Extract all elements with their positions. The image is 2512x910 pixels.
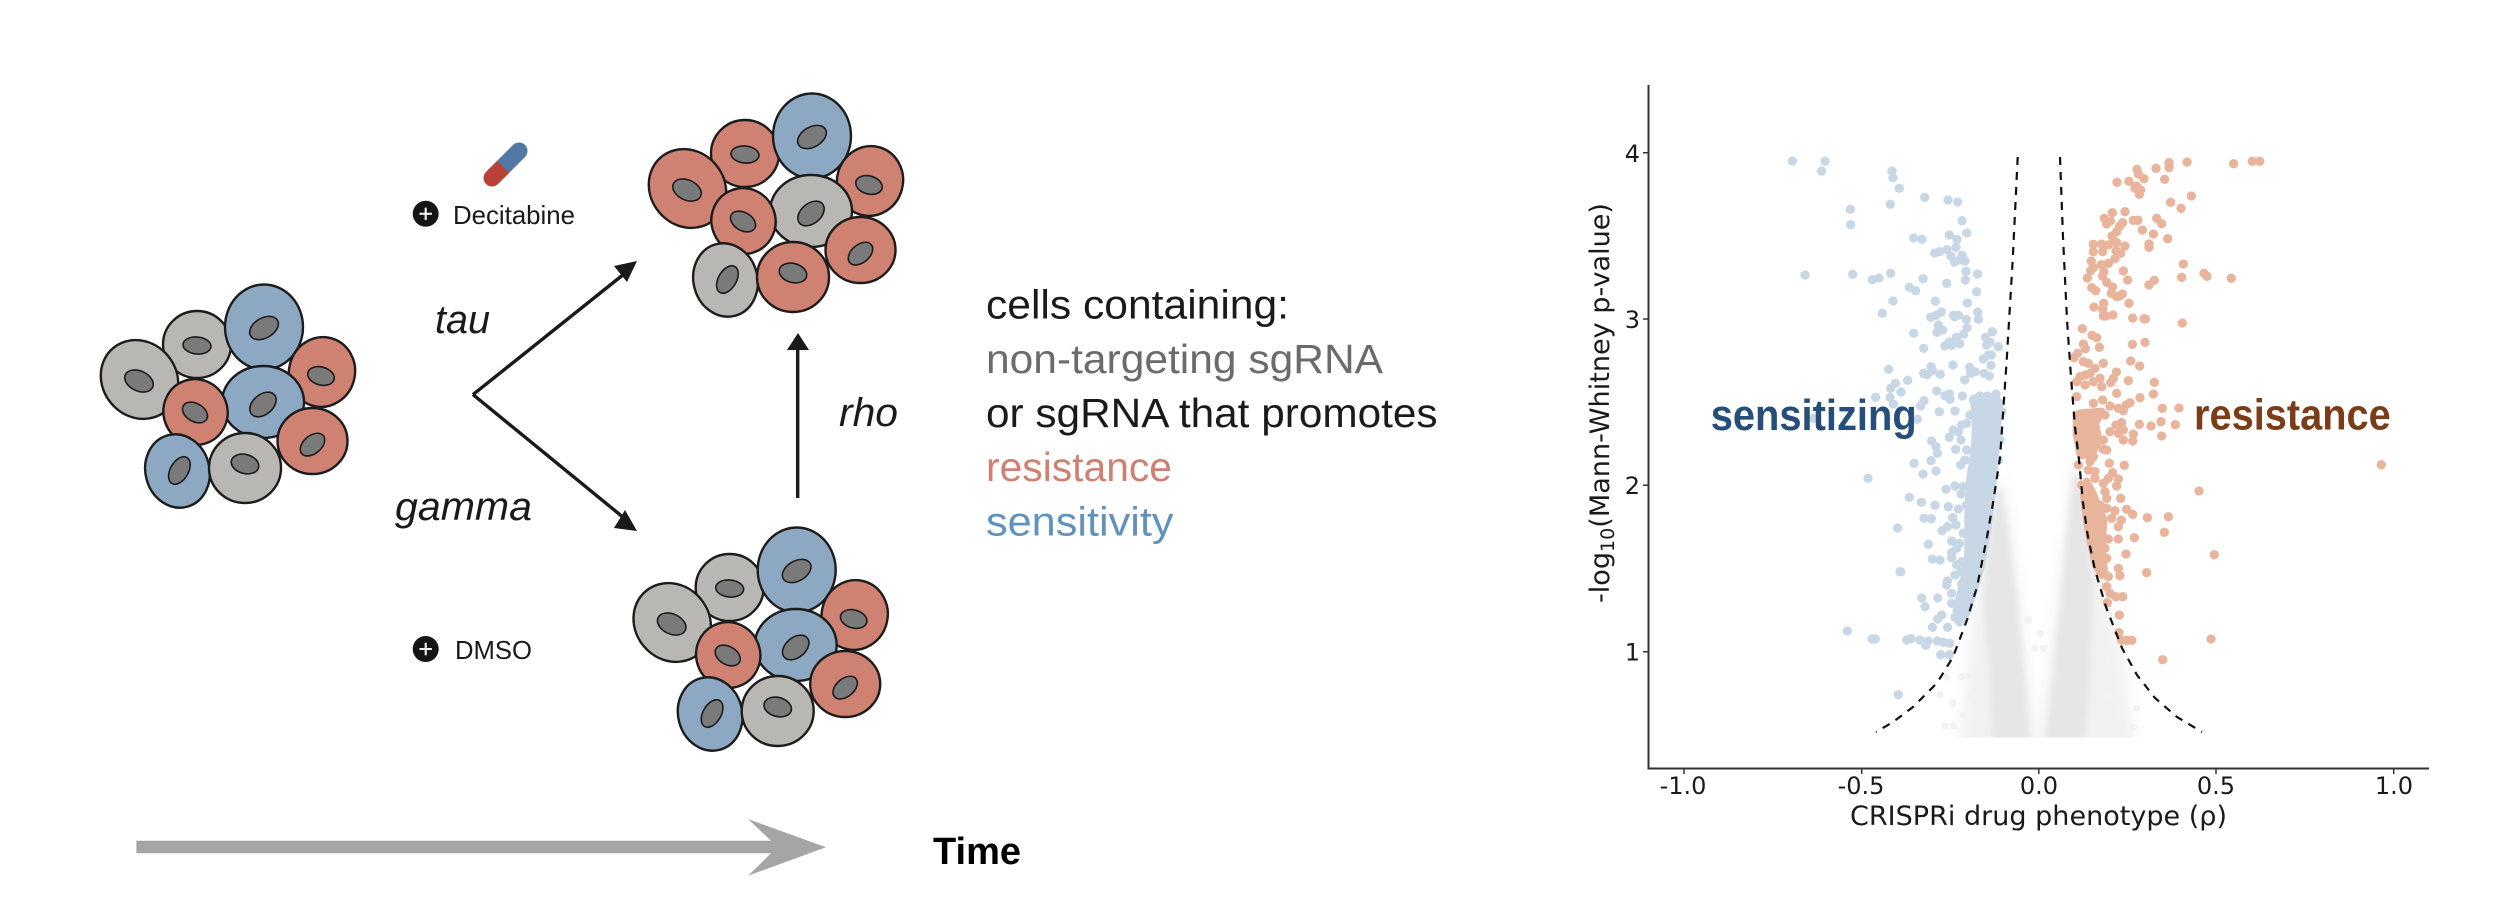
y axis tick labels: 4 — [1625, 140, 1640, 168]
significance threshold: left dashed curve — [1876, 157, 2018, 732]
label: gamma: gamma — [395, 485, 532, 529]
cell cluster: after decitabine — [633, 94, 911, 324]
chart: volcano plot — [1585, 85, 2429, 832]
legend: cells containing: sensitivity — [986, 498, 1174, 544]
y axis title: 10 — [1597, 528, 1619, 552]
axes — [1643, 85, 2429, 774]
label: time: Time — [933, 831, 1021, 873]
x axis tick labels: -1.0 — [1660, 772, 1706, 800]
arrow: rho vertical — [787, 333, 809, 498]
label: plus decitabine: Decitabine — [453, 200, 575, 230]
legend: cells containing: non-targeting sgRNA — [986, 336, 1384, 382]
y axis tick labels: 3 — [1625, 306, 1640, 334]
resistance sgRNA points — [2074, 161, 2381, 660]
label: plus DMSO: DMSO — [455, 635, 532, 665]
y axis tick labels: 2 — [1625, 472, 1640, 500]
label: tau: tau — [435, 298, 490, 342]
x axis tick labels: 1.0 — [2375, 772, 2413, 800]
x axis tick labels — [1660, 772, 2413, 800]
panel: experiment schematic — [85, 94, 1438, 876]
sensitizing sgRNA points — [1792, 161, 2002, 695]
legend: cells containing: or sgRNA that promotes — [986, 390, 1438, 436]
neutral sgRNA cloud — [1936, 471, 2140, 738]
label: plus DMSO — [413, 635, 532, 665]
x axis tick labels: 0.5 — [2197, 772, 2235, 800]
y axis title: (Mann-Whitney p-value) — [1585, 203, 1616, 528]
label: sensitizing: sensitizing — [1711, 391, 1917, 440]
x axis tick labels: 0.0 — [2020, 772, 2058, 800]
cell cluster: starting population — [85, 284, 363, 515]
arrow: branch to decitabine — [473, 261, 637, 395]
legend: cells containing: resistance — [986, 444, 1172, 490]
legend: cells containing: cells containing: — [986, 282, 1289, 328]
label: resistance: resistance — [2194, 390, 2391, 440]
y axis tick labels: 1 — [1625, 638, 1640, 666]
x axis title: CRISPRi drug phenotype (ρ) — [1850, 801, 2227, 832]
cell cluster: after DMSO — [618, 528, 896, 758]
legend: cells containing — [986, 282, 1438, 544]
arrow: branch to DMSO — [473, 395, 637, 531]
x axis tick labels: -0.5 — [1838, 772, 1884, 800]
icon: drug capsule — [492, 151, 519, 178]
label: rho: rho — [839, 391, 898, 435]
y axis title: -log — [1585, 552, 1616, 603]
significance threshold: right dashed curve — [2060, 157, 2202, 732]
y axis tick labels — [1625, 140, 1640, 666]
arrow: time — [136, 819, 826, 876]
